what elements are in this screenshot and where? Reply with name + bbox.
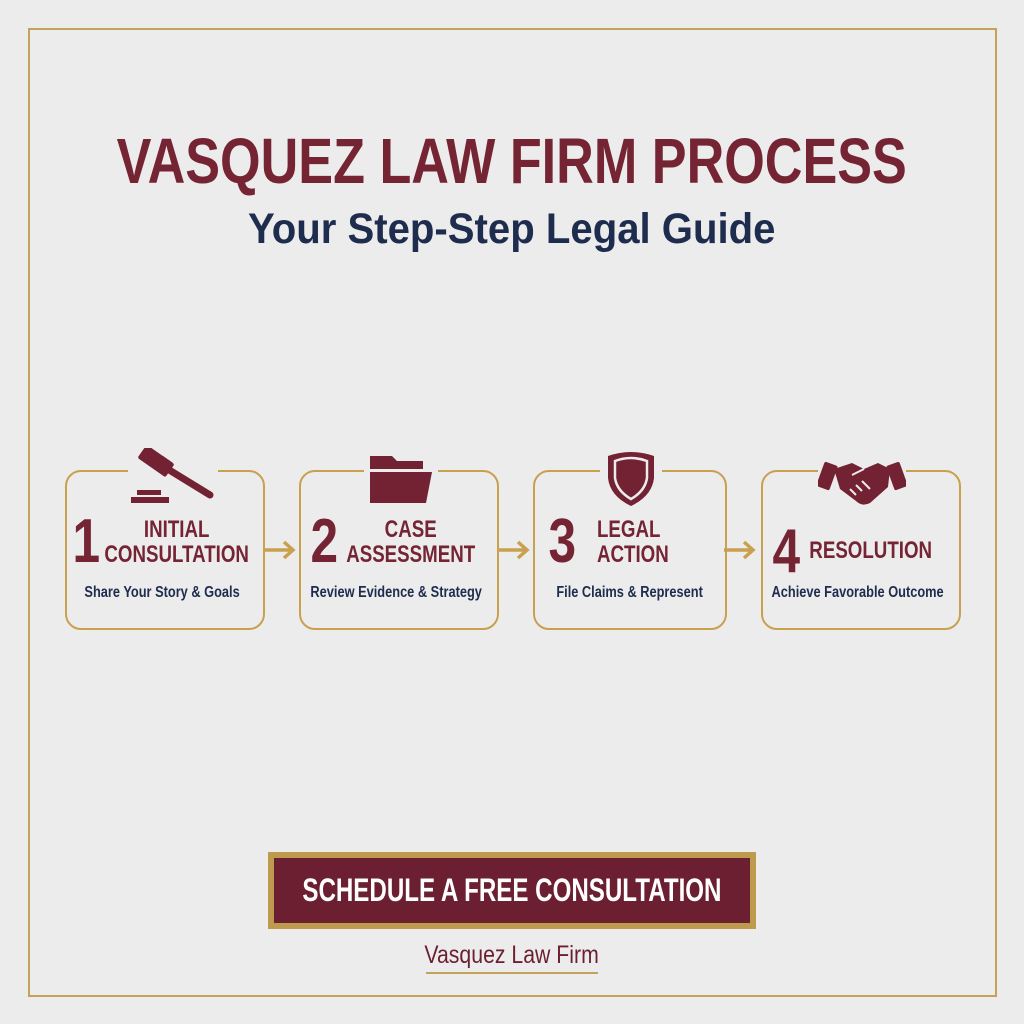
label 2 <box>346 516 475 568</box>
number 4: 4 <box>772 517 800 586</box>
description 2: Review Evidence & Strategy <box>310 584 482 601</box>
footer firm name: Vasquez Law Firm <box>425 941 599 969</box>
icon: handshake <box>818 455 906 505</box>
CTA button: SCHEDULE A FREE CONSULTATION <box>302 872 722 908</box>
arrow 2 <box>499 540 530 560</box>
description 4: Achieve Favorable Outcome <box>772 584 944 601</box>
label 4: RESOLUTION <box>810 537 932 564</box>
description 1: Share Your Story & Goals <box>84 584 240 601</box>
number 3: 3 <box>548 507 576 576</box>
label 3: ACTION <box>597 541 669 568</box>
description 3: File Claims & Represent <box>557 584 703 601</box>
title: VASQUEZ LAW FIRM PROCESS <box>117 125 907 197</box>
label 1 <box>105 516 249 568</box>
step 2 panel <box>299 470 499 630</box>
arrow 3 <box>724 540 756 560</box>
label 2: CASE <box>385 516 437 543</box>
CTA button <box>268 852 756 929</box>
step 3 panel <box>533 470 727 630</box>
number 1: 1 <box>72 507 100 576</box>
subtitle: Your Step-Step Legal Guide <box>248 205 776 253</box>
arrow 1 <box>265 540 296 560</box>
number 2: 2 <box>310 507 338 576</box>
label 3 <box>597 516 669 568</box>
step 1 panel <box>65 470 265 630</box>
label 2: ASSESSMENT <box>347 541 475 568</box>
icon: gavel <box>128 448 218 508</box>
label 1: CONSULTATION <box>105 541 249 568</box>
icon: shield <box>600 448 662 510</box>
step 4 panel <box>761 470 961 630</box>
icon: folder <box>364 452 438 506</box>
label 1: INITIAL <box>144 516 210 543</box>
label 3: LEGAL <box>597 516 660 543</box>
